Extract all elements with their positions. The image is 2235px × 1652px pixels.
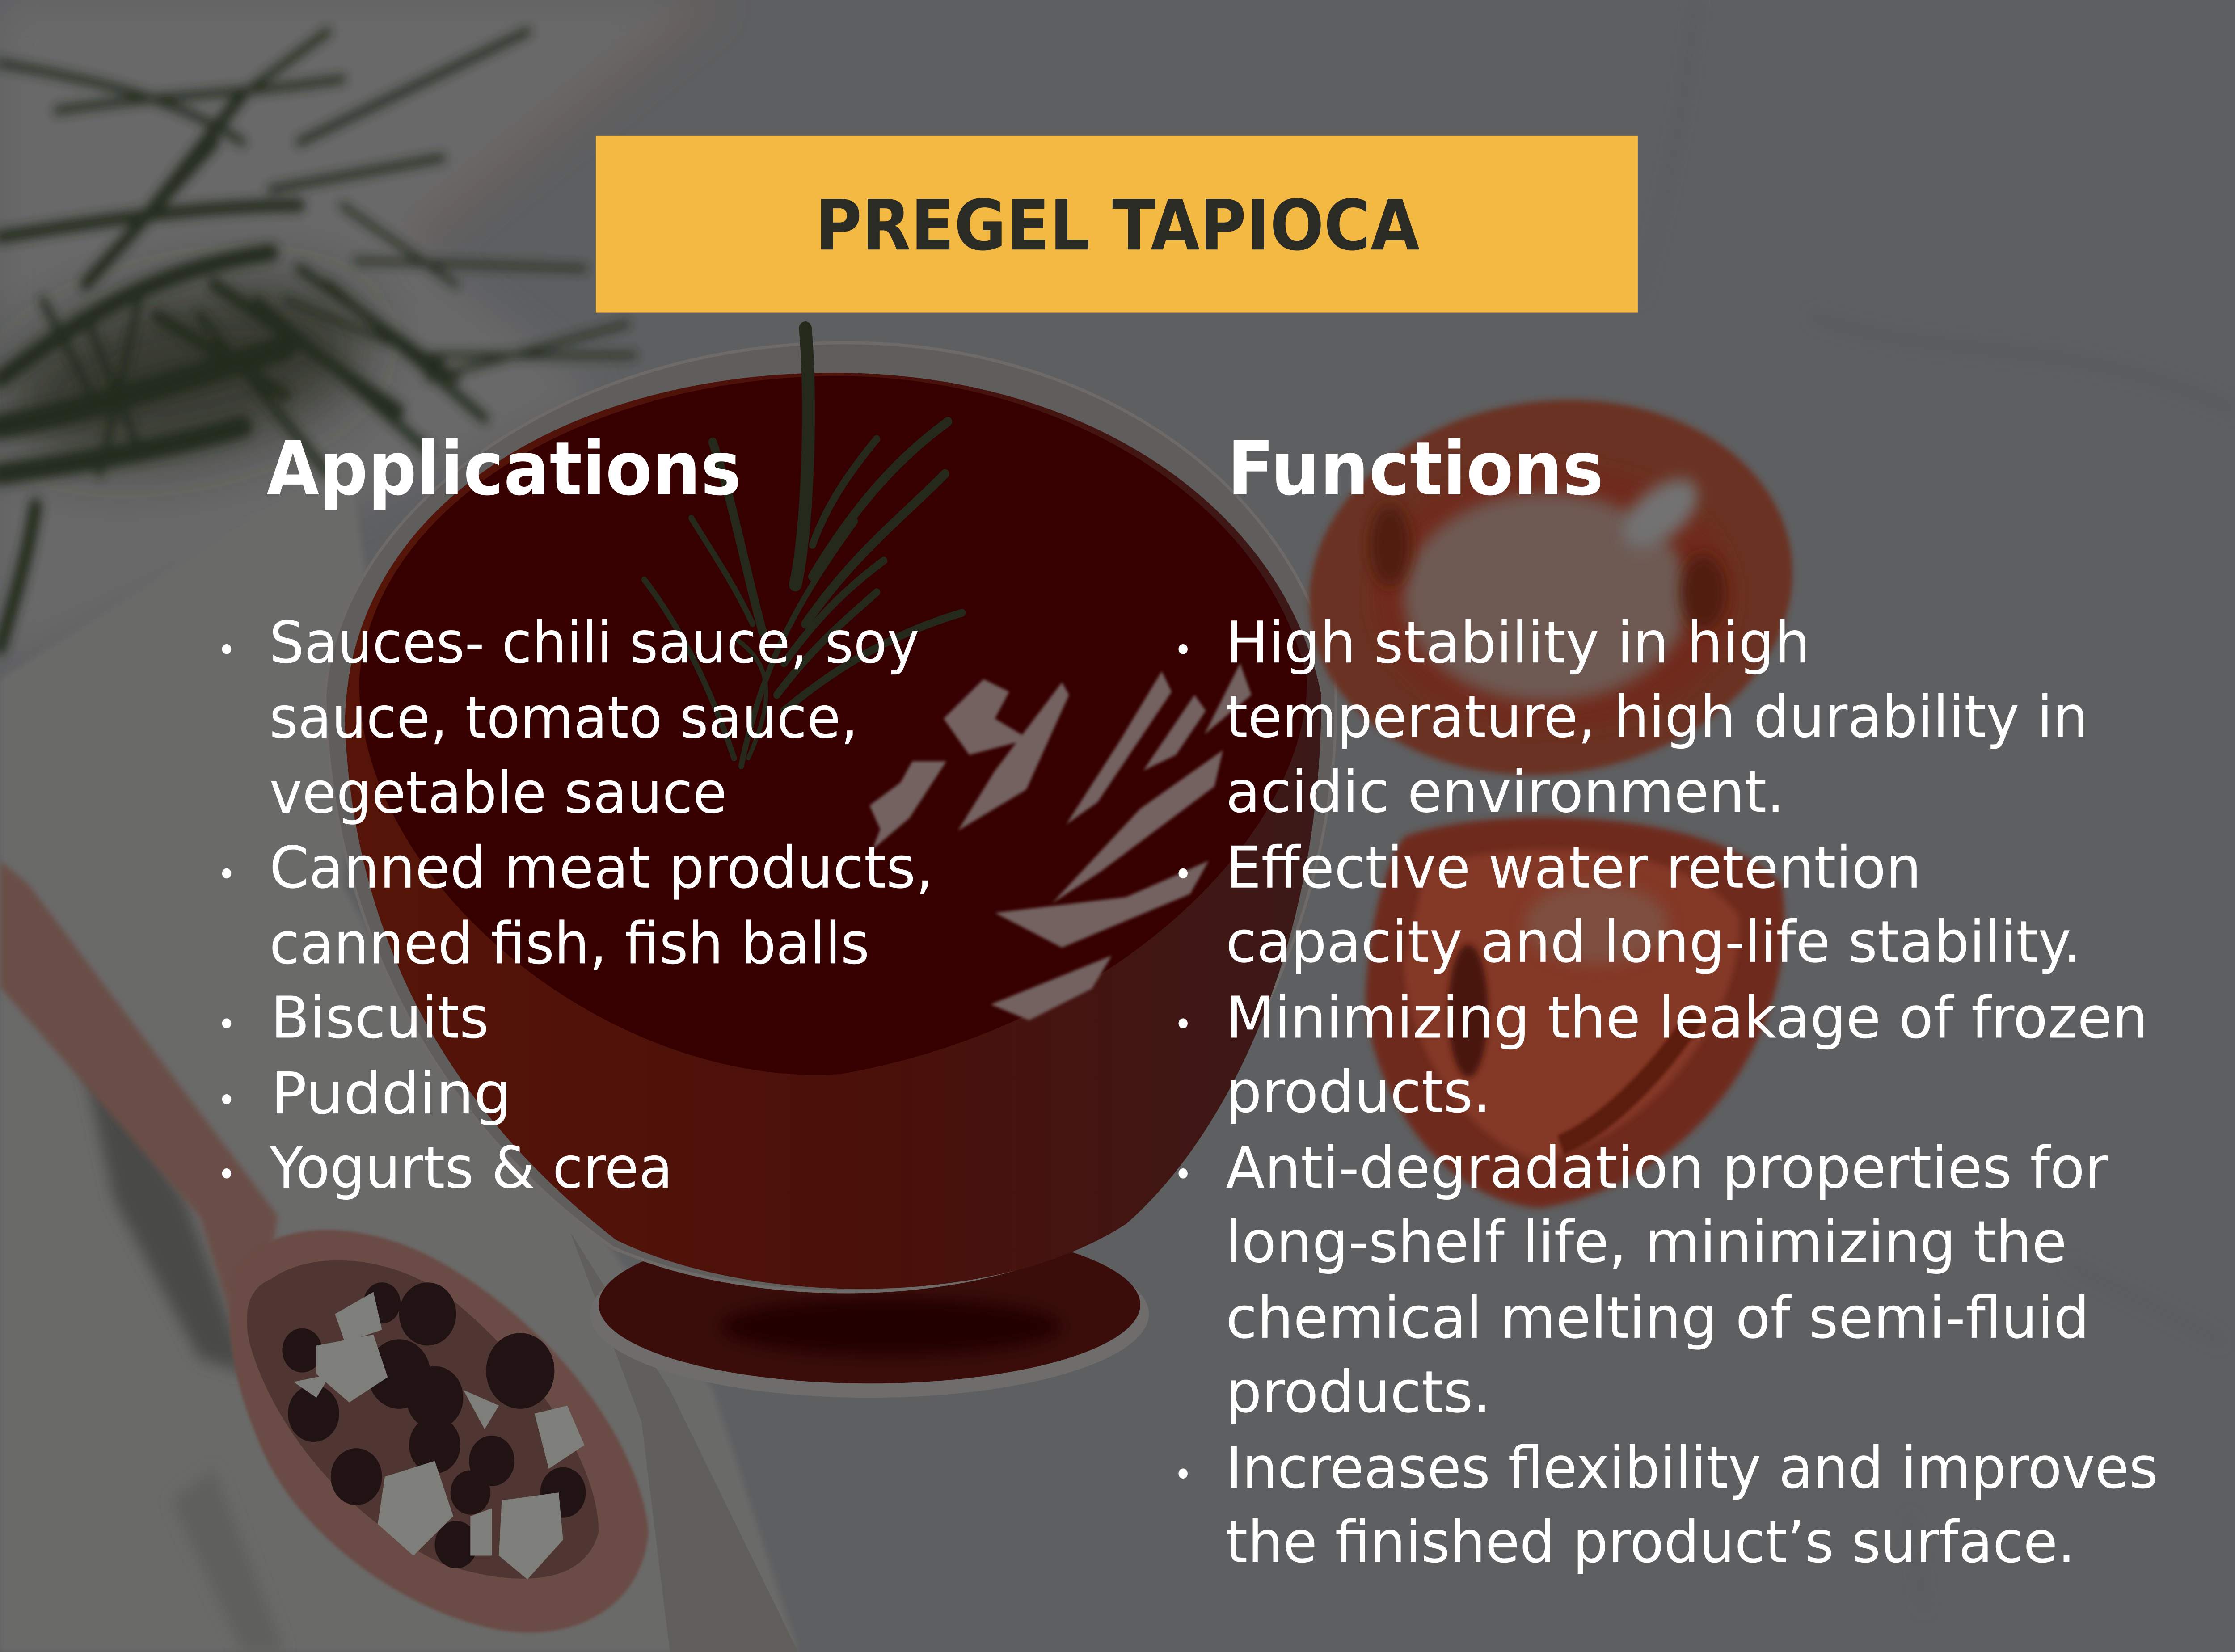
rosemary shadow mass top left xyxy=(0,258,380,485)
applications list: Pudding xyxy=(271,1060,512,1127)
applications list: canned fish, fish balls xyxy=(270,910,869,977)
linen cloth xyxy=(0,458,798,1652)
functions list: Minimizing the leakage of frozen xyxy=(1226,984,2148,1051)
functions list: products. xyxy=(1226,1058,1491,1125)
functions list: High stability in high xyxy=(1226,609,1810,676)
applications list xyxy=(222,609,934,1201)
functions list: capacity and long-life stability. xyxy=(1226,908,2081,975)
applications list: Canned meat products, xyxy=(270,834,934,901)
rosemary sprig in sauce xyxy=(644,329,962,766)
title banner xyxy=(596,136,1638,313)
blurred linen top left xyxy=(0,0,727,663)
applications list: Sauces- chili sauce, soy xyxy=(270,609,919,676)
title text: PREGEL TAPIOCA xyxy=(815,185,1420,266)
applications list: Biscuits xyxy=(271,984,489,1051)
bowl glass rim xyxy=(325,343,1336,1292)
functions list xyxy=(1178,609,2158,1576)
bowl side with sauce xyxy=(345,373,1321,1289)
lower tomato half xyxy=(1366,818,1784,1208)
sauce surface xyxy=(359,376,1307,1075)
functions list: Anti-degradation properties for xyxy=(1226,1134,2108,1201)
applications list: sauce, tomato sauce, xyxy=(270,684,858,751)
functions list: the finished product’s surface. xyxy=(1226,1509,2075,1576)
panel: applications xyxy=(222,426,934,1201)
applications list: vegetable sauce xyxy=(270,759,727,826)
heading: applications: Applications xyxy=(266,426,741,512)
functions list: Effective water retention xyxy=(1226,834,1921,901)
heading: functions: Functions xyxy=(1227,426,1603,512)
functions list: long-shelf life, minimizing the xyxy=(1226,1209,2067,1276)
functions list: products. xyxy=(1226,1358,1491,1425)
top tomato half xyxy=(1292,374,1809,801)
bowl base xyxy=(590,1226,1149,1398)
panel: functions xyxy=(1178,426,2158,1576)
functions list: temperature, high durability in xyxy=(1226,683,2088,750)
peppercorns and salt in spoon xyxy=(282,1282,586,1579)
rosemary branch top left xyxy=(0,32,634,648)
functions list: acidic environment. xyxy=(1226,759,1784,826)
marble table veins xyxy=(1639,0,2235,1611)
wooden spoon xyxy=(0,861,649,1633)
functions list: Increases flexibility and improves xyxy=(1226,1434,2158,1501)
applications list: Yogurts & crea xyxy=(269,1134,673,1201)
functions list: chemical melting of semi-fluid xyxy=(1226,1284,2090,1351)
sauce swirl streaks xyxy=(869,663,1252,1020)
